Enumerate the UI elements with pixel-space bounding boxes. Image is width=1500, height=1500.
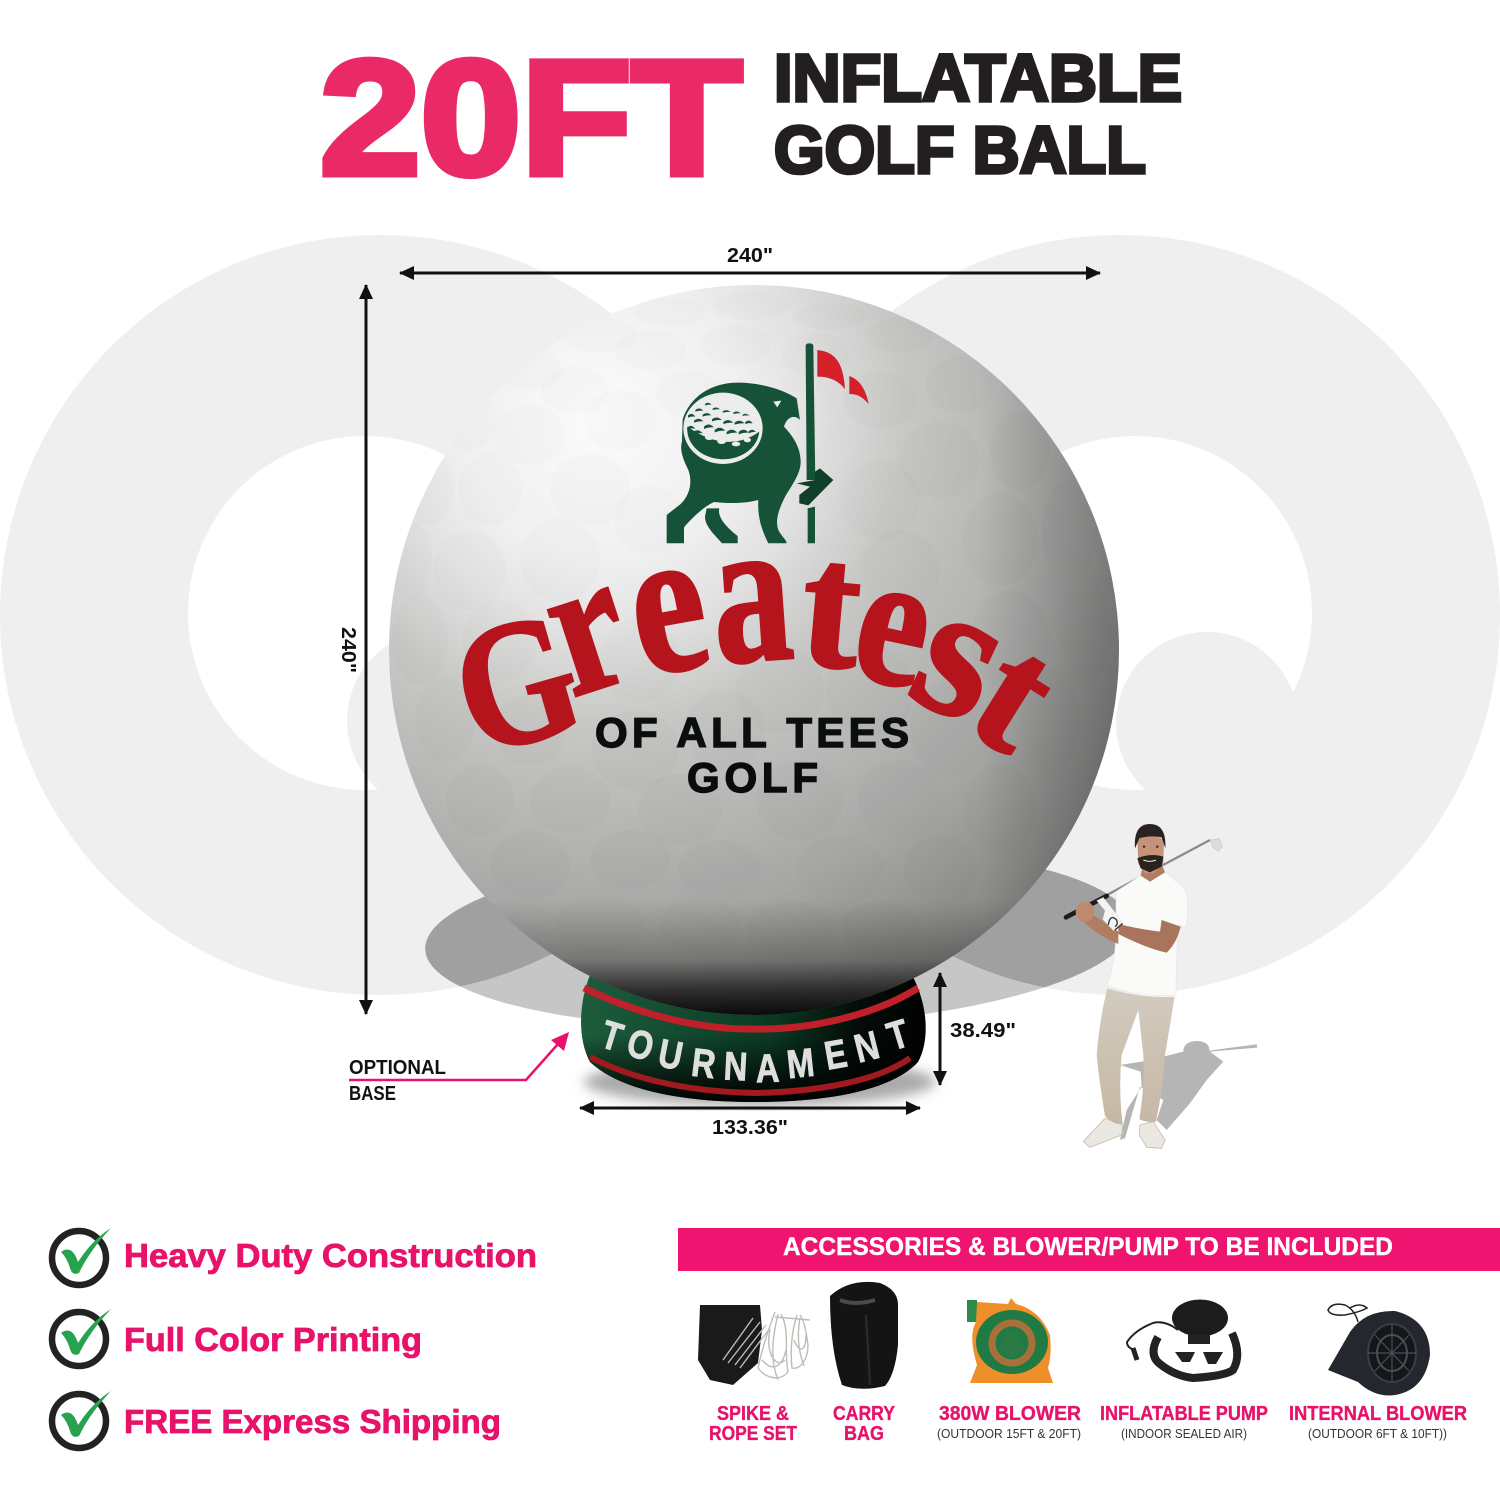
label: carry bag: CARRY — [833, 1403, 896, 1425]
golfer pants — [1097, 988, 1175, 1124]
greatest lettering: r — [518, 510, 653, 738]
dimension: height: 240" — [337, 627, 359, 673]
golfer neck — [1141, 867, 1165, 882]
greatest lettering: s — [885, 542, 1041, 764]
label: inflatable pump — [1100, 1403, 1268, 1441]
golfer shirt — [1107, 872, 1188, 996]
label: spike and rope set — [709, 1403, 797, 1445]
icon: check 1 — [52, 1228, 111, 1285]
goat body — [667, 383, 801, 543]
dimension: base height — [940, 973, 1016, 1085]
label: spike and rope set: ROPE SET — [709, 1423, 797, 1445]
greatest lettering: G — [433, 572, 600, 794]
golf ball — [388, 285, 1119, 1015]
tournament lettering: U — [655, 1030, 687, 1079]
tournament lettering: O — [622, 1020, 659, 1070]
label: internal blower: (OUTDOOR 6FT & 10FT)) — [1308, 1426, 1447, 1441]
golf ball on goat — [683, 393, 763, 464]
ground shadow — [425, 870, 1116, 1018]
greatest lettering: t — [942, 599, 1090, 788]
label: inflatable pump: INFLATABLE PUMP — [1100, 1403, 1268, 1425]
of all tees: OF ALL TEES — [595, 709, 909, 756]
tournament lettering: N — [723, 1043, 749, 1089]
icon: check 2 — [52, 1309, 111, 1366]
greatest lettering: e — [610, 480, 723, 721]
background rings — [0, 235, 1500, 995]
label: 380w blower: (OUTDOOR 15FT & 20FT) — [937, 1426, 1081, 1441]
icon: check 3 — [52, 1391, 111, 1448]
golfer right shoe — [1139, 1122, 1165, 1148]
greatest lettering: t — [794, 505, 869, 708]
tournament lettering — [596, 1011, 914, 1091]
label: 380w blower — [937, 1403, 1082, 1441]
label: inflatable pump: (INDOOR SEALED AIR) — [1121, 1426, 1247, 1441]
feature list — [52, 1228, 537, 1448]
callout: optional base — [349, 1032, 569, 1105]
greatest lettering: a — [704, 472, 799, 708]
label: internal blower — [1289, 1403, 1467, 1441]
red flag — [817, 350, 869, 404]
dimension: top width: 240" — [727, 245, 773, 267]
goat logo with flag — [667, 343, 869, 543]
golfer forearm — [1118, 920, 1181, 953]
accessory: 380w blower — [967, 1298, 1053, 1383]
goat hoof holding pole — [797, 468, 833, 505]
title: 20FT: 20FT — [320, 26, 742, 209]
tournament lettering: M — [785, 1040, 817, 1087]
dimension: base width: 133.36" — [712, 1117, 788, 1139]
golfer other forearm — [1085, 916, 1118, 944]
golf: GOLF — [687, 754, 818, 801]
label: internal blower: INTERNAL BLOWER — [1289, 1403, 1467, 1425]
callout: optional base: OPTIONAL — [349, 1057, 446, 1079]
label: spike and rope set: SPIKE & — [717, 1403, 789, 1425]
golfer head — [1135, 824, 1165, 873]
feature: full color: Full Color Printing — [124, 1321, 422, 1358]
goat back leg — [705, 508, 738, 543]
accessory: internal blower — [1328, 1304, 1430, 1395]
label: 380w blower: 380W BLOWER — [939, 1403, 1082, 1425]
goat eye — [773, 401, 781, 407]
golf club — [1065, 838, 1223, 917]
title — [320, 26, 1182, 209]
golfer fist — [1076, 901, 1094, 922]
title: inflatable: INFLATABLE — [774, 41, 1182, 116]
greatest lettering — [433, 472, 1090, 794]
optional base: tournament ring — [581, 955, 926, 1102]
tournament lettering: N — [850, 1022, 884, 1071]
tournament lettering: A — [755, 1046, 780, 1091]
label: carry bag — [833, 1403, 896, 1445]
golfing glove — [1097, 897, 1123, 931]
callout: optional base: BASE — [349, 1083, 396, 1105]
accessory: spike and rope set — [698, 1305, 810, 1385]
accessory: carry bag — [830, 1282, 898, 1389]
tournament lettering: T — [882, 1011, 914, 1059]
accessories banner: ACCESSORIES & BLOWER/PUMP TO BE INCLUDED — [783, 1233, 1393, 1261]
flag pole — [806, 343, 815, 543]
feature: heavy duty: Heavy Duty Construction — [124, 1237, 537, 1274]
golfer shadow — [1120, 1041, 1257, 1140]
feature: free shipping: FREE Express Shipping — [124, 1403, 501, 1440]
accessory labels — [709, 1403, 1467, 1445]
greatest lettering: e — [839, 509, 952, 730]
tournament lettering: E — [821, 1031, 850, 1079]
title: golf ball: GOLF BALL — [774, 113, 1146, 188]
accessories banner — [678, 1228, 1500, 1271]
golfer left shoe — [1083, 1118, 1123, 1147]
tournament lettering: R — [689, 1040, 718, 1087]
dimension: base height: 38.49" — [950, 1020, 1016, 1042]
dimples — [388, 292, 1111, 960]
label: carry bag: BAG — [844, 1423, 884, 1445]
base shadow — [584, 1058, 936, 1106]
accessory: inflatable pump — [1127, 1300, 1237, 1378]
golfer figure — [1065, 824, 1257, 1148]
of all tees golf — [595, 709, 909, 801]
tournament lettering: T — [596, 1012, 628, 1060]
